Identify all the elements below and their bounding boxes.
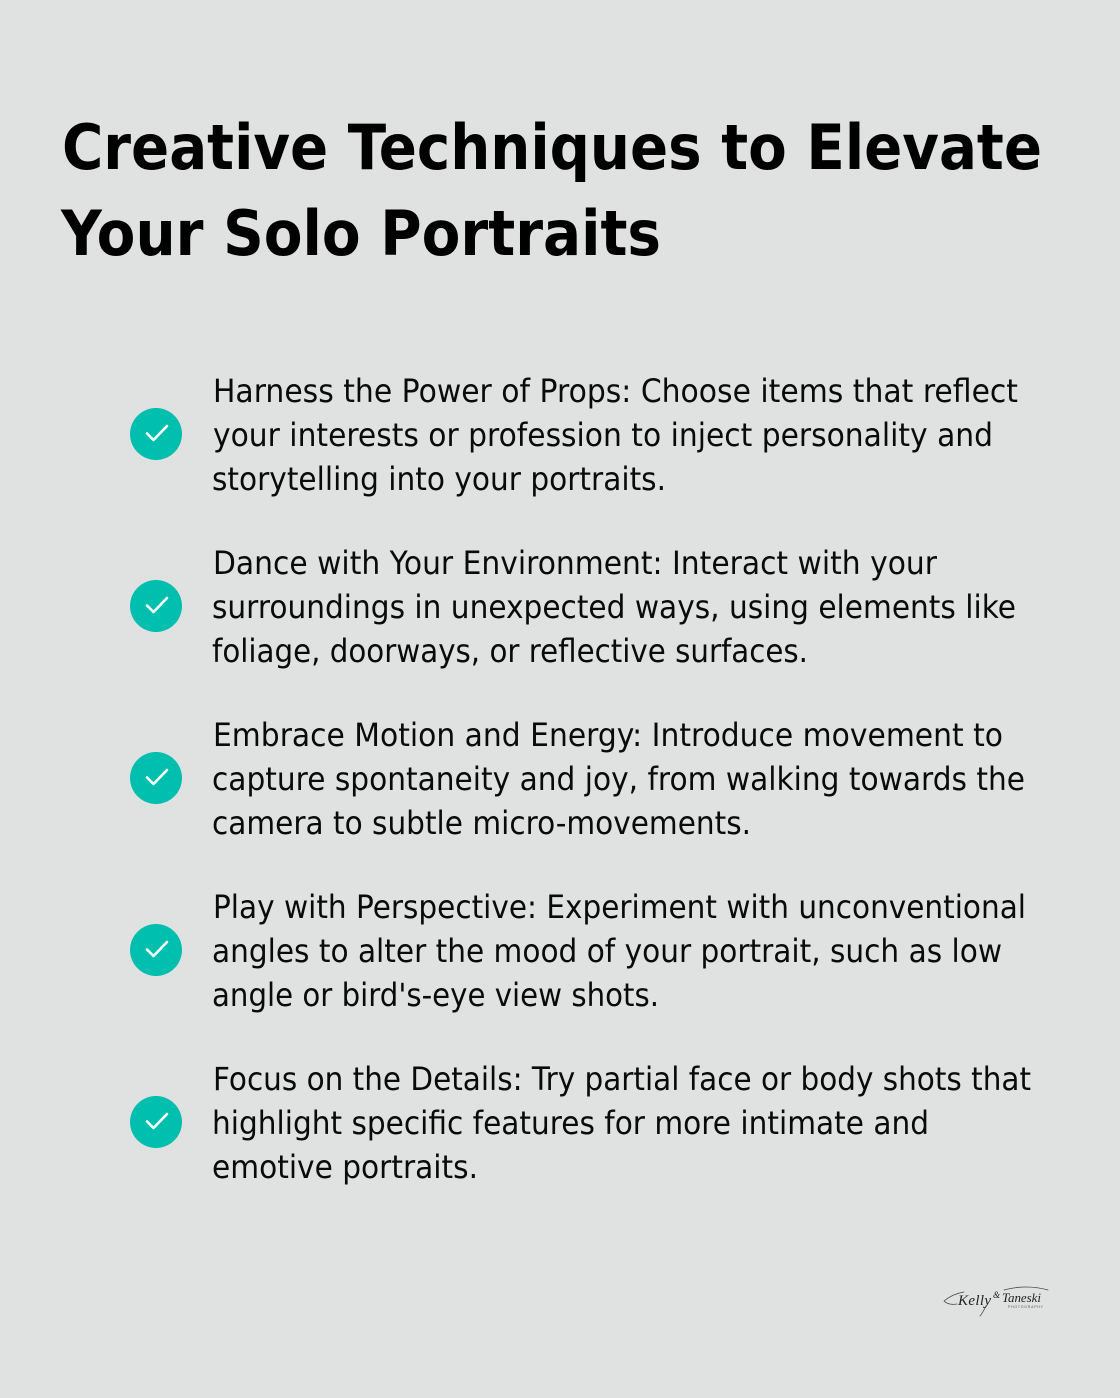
logo: signature: & xyxy=(993,1290,1000,1300)
text block: perspective: angle or bird's-eye view shots. xyxy=(212,976,659,1014)
list item 2: environment xyxy=(130,544,1016,670)
icon: check circle xyxy=(130,1096,182,1148)
list item 1: props xyxy=(130,372,1018,498)
logo: signature: Kelly xyxy=(957,1293,991,1309)
text block: props: storytelling into your portraits. xyxy=(212,460,666,498)
text block: perspective: Play with Perspective: Experiment with unconventional xyxy=(213,888,1026,926)
text block: props: Harness the Power of Props: Choose items that reflect xyxy=(213,372,1018,410)
title: Your Solo Portraits xyxy=(60,197,661,270)
text block: environment: foliage, doorways, or reflective surfaces. xyxy=(212,632,808,670)
icon: check circle xyxy=(130,580,182,632)
text block: motion: camera to subtle micro-movements. xyxy=(212,804,751,842)
text block: props xyxy=(212,372,1018,498)
text block: environment: surroundings in unexpected ways, using elements like xyxy=(212,588,1016,626)
icon: check circle xyxy=(130,752,182,804)
text block: perspective: angles to alter the mood of your portrait, such as low xyxy=(212,932,1002,970)
text block: environment: Dance with Your Environment: Interact with your xyxy=(213,544,938,582)
icon: check circle xyxy=(130,408,182,460)
text block: details: Focus on the Details: Try partial face or body shots that xyxy=(213,1060,1031,1098)
text block: environment xyxy=(212,544,1016,670)
icon: check circle xyxy=(130,924,182,976)
text block: motion xyxy=(212,716,1025,842)
logo: signature xyxy=(944,1287,1048,1316)
list item 5: details xyxy=(130,1060,1031,1186)
text block: motion: Embrace Motion and Energy: Introduce movement to xyxy=(213,716,1003,754)
list item 3: motion xyxy=(130,716,1025,842)
logo: signature: PHOTOGRAPHY xyxy=(1008,1305,1044,1309)
title: Creative Techniques to Elevate xyxy=(62,111,1042,184)
text block: props: your interests or profession to inject personality and xyxy=(213,416,993,454)
title xyxy=(60,111,1042,270)
logo: signature: Taneski xyxy=(1002,1290,1041,1305)
text block: details xyxy=(212,1060,1031,1186)
list item 4: perspective xyxy=(130,888,1026,1014)
text block: details: highlight specific features for more intimate and xyxy=(212,1104,929,1142)
text block: details: emotive portraits. xyxy=(212,1148,478,1186)
text block: motion: capture spontaneity and joy, from walking towards the xyxy=(212,760,1025,798)
text block: perspective xyxy=(212,888,1026,1014)
